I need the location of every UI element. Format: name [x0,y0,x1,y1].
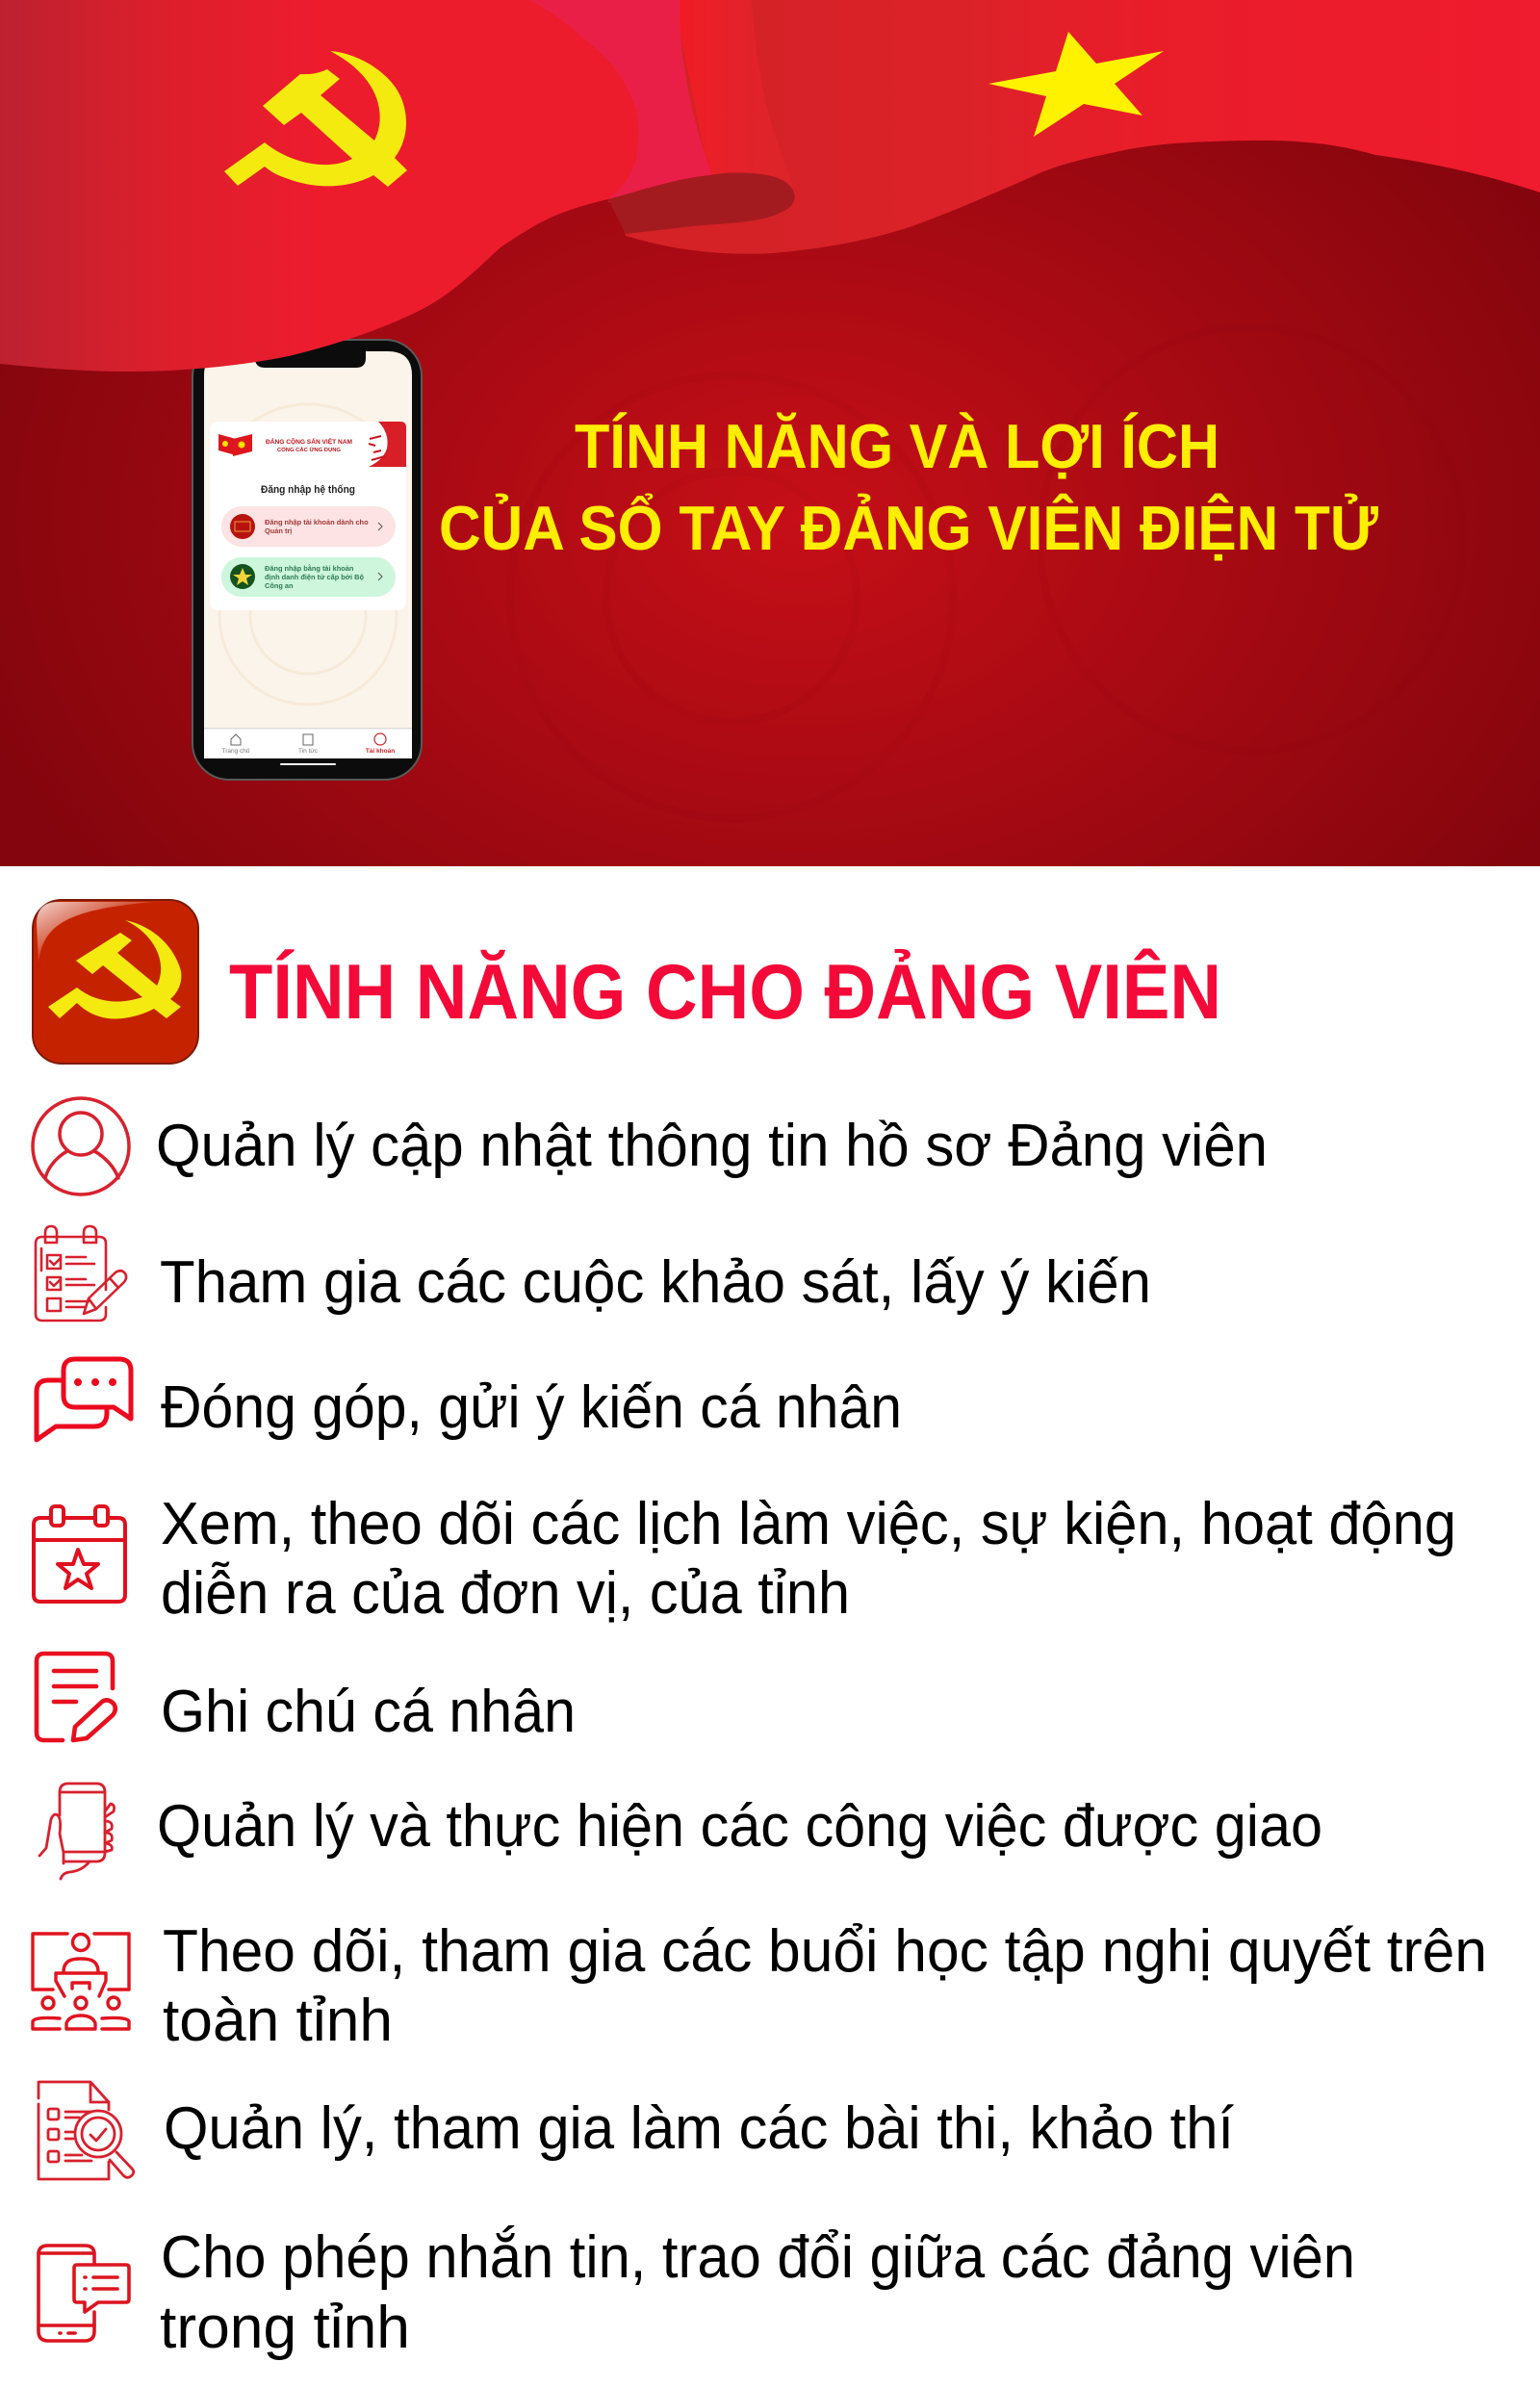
text: profile: Quản lý cập nhật thông tin hồ sơ Đảng viên [156,1113,1268,1179]
flag: dark curl [608,172,795,234]
heading: features: TÍNH NĂNG CHO ĐẢNG VIÊN [229,947,1221,1036]
phone mockup [192,340,422,780]
text: messaging: trong tỉnh [160,2295,410,2361]
flag: back panel with star [616,0,1540,254]
text: feedback: Đóng góp, gửi ý kiến cá nhân [161,1374,902,1441]
flag: front panel with emblem [0,0,639,372]
icon: hand holding phone [39,1784,115,1879]
admin login button: Đăng nhập tài khoản dành cho [265,518,369,526]
admin login button: Quản trị [265,526,292,535]
phone bottom navigation [204,728,412,765]
icon: document with magnifier [38,2082,134,2179]
login card [210,422,406,610]
app header title: ĐẢNG CỘNG SẢN VIỆT NAM [266,437,352,446]
portrait emblem [369,422,406,467]
text: study sessions [163,1918,1487,2054]
flag: red band of fold [674,0,795,195]
phone bottom navigation: Tin tức [298,748,319,755]
phone notch [255,351,366,368]
panel: red header background [0,0,1540,866]
icon: clipboard with pencil [36,1226,126,1321]
admin login button [221,506,396,547]
phone screen [204,351,412,758]
heading: main title: CỦA SỔ TAY ĐẢNG VIÊN ĐIỆN TỬ [439,493,1378,563]
text: study sessions: Theo dõi, tham gia các buổi học tập nghị quyết trên [163,1918,1487,1985]
heading: main title: TÍNH NĂNG VÀ LỢI ÍCH [575,411,1219,481]
text: exams: Quản lý, tham gia làm các bài thi, khảo thí [164,2095,1234,2162]
app header subtitle: CỔNG CÁC ỨNG DỤNG [277,447,341,453]
heading: main title [439,411,1378,563]
citizen ID login button [221,557,396,597]
citizen ID login button: định danh điện tử cấp bởi Bộ [265,573,364,581]
feature 6: tasks [39,1784,1322,1879]
feature 4: calendar [34,1491,1456,1627]
icon: presenter and audience [33,1934,129,2029]
icon: party logo button [33,900,198,1064]
feature 7: study sessions [33,1918,1487,2054]
text: messaging: Cho phép nhắn tin, trao đổi giữa các đảng viên [161,2224,1355,2291]
feature 5: notes [37,1654,576,1745]
icon: phone with message bubble [38,2246,129,2341]
feature 3: feedback [37,1359,902,1441]
text: calendar: diễn ra của đơn vị, của tỉnh [161,1560,850,1627]
feature 8: exams [38,2082,1234,2179]
text: tasks: Quản lý và thực hiện các công việc được giao [157,1793,1322,1860]
icon: calendar with star [34,1506,125,1602]
feature 2: survey [36,1226,1151,1321]
icon: chat bubbles [37,1359,131,1440]
icon: hammer and sickle on flag [224,51,407,187]
text: survey: Tham gia các cuộc khảo sát, lấy ý kiến [160,1249,1151,1316]
text: calendar: Xem, theo dõi các lịch làm việc, sự kiện, hoạt động [161,1491,1456,1557]
icon: user [33,1098,129,1194]
text: study sessions: toàn tỉnh [163,1988,393,2054]
login heading: Đăng nhập hệ thống [261,484,355,496]
flag: pink fold [529,0,712,202]
phone bottom navigation: Trang chủ [221,747,250,755]
citizen ID login button: Đăng nhập bằng tài khoản [265,564,354,573]
feature 9: messaging [38,2224,1355,2361]
icon: star on flag [988,32,1164,137]
phone bottom navigation: Tài khoản [366,748,395,755]
icon: note with pencil [37,1654,116,1740]
feature 1: profile [33,1098,1268,1194]
app header flags [218,434,252,456]
text: notes: Ghi chú cá nhân [161,1679,576,1745]
text: messaging [160,2224,1355,2361]
citizen ID login button: Công an [265,581,294,590]
text: calendar [161,1491,1456,1627]
